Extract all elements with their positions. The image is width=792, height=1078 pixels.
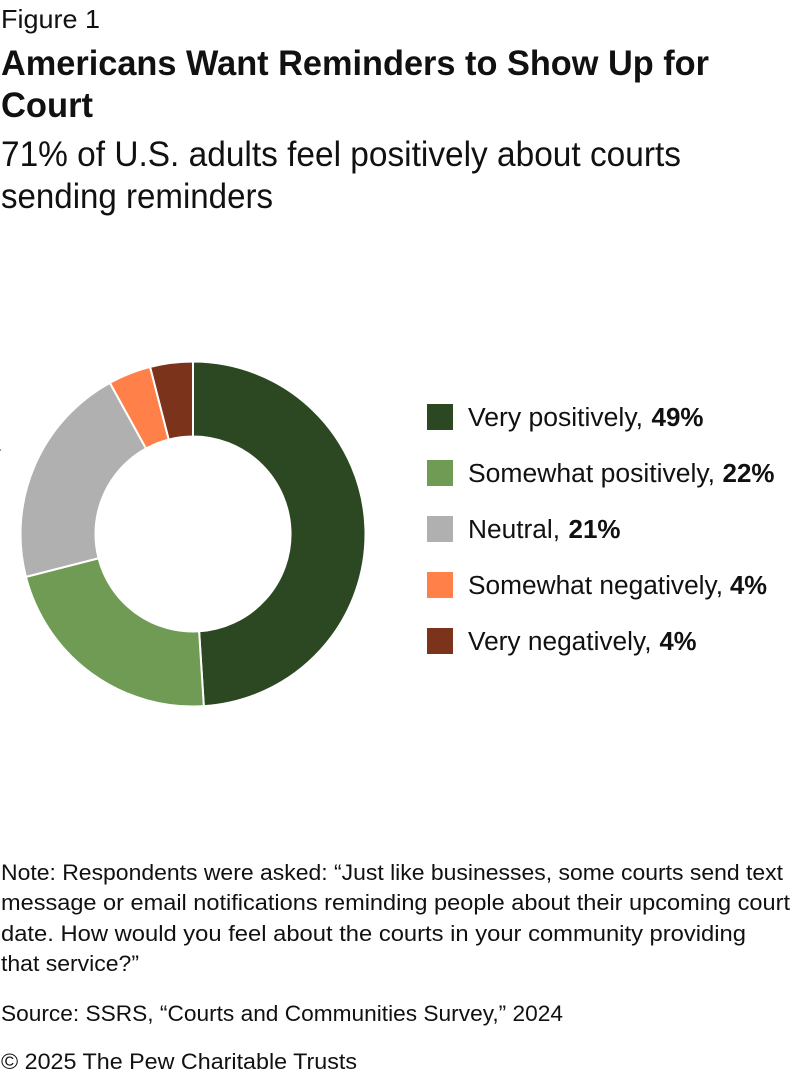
legend item: very negatively [427,628,696,656]
legend item: neutral: Neutral, [468,516,560,544]
note: Note: Respondents were asked: “Just like businesses, some courts send text [1,860,784,885]
donut chart [21,362,366,707]
segment: very negatively 4% [150,362,193,440]
legend item: somewhat positively: Somewhat positively, [468,460,715,488]
note [1,860,791,976]
title [1,44,709,125]
legend item: very negatively: 4% [660,628,696,656]
legend item: neutral [427,516,620,544]
note: that service?” [1,951,139,976]
source: Source: SSRS, “Courts and Communities Survey,” 2024 [1,1001,563,1026]
legend item: somewhat negatively: Somewhat negatively, [468,572,723,600]
subtitle [1,135,681,216]
stray tick mark [0,450,1,451]
segment: somewhat negatively 4% [110,367,169,449]
segment: somewhat positively 22% [26,558,204,707]
note: message or email notifications reminding people about their upcoming court [1,890,791,915]
legend item: very positively: Very positively, [468,404,643,432]
legend item: somewhat negatively: 4% [730,572,767,600]
legend item: very positively [427,404,704,432]
title: Americans Want Reminders to Show Up for [1,44,709,83]
legend item: somewhat positively [427,460,774,488]
legend item: neutral: 21% [568,516,620,544]
legend item: very positively: 49% [652,404,704,432]
subtitle: 71% of U.S. adults feel positively about courts [1,135,681,174]
subtitle: sending reminders [1,177,273,216]
title: Court [1,86,93,125]
copyright: © 2025 The Pew Charitable Trusts [1,1049,357,1074]
legend [427,404,774,656]
legend item: somewhat positively: 22% [722,460,774,488]
segment: very positively 49% [193,362,366,706]
note: date. How would you feel about the courts in your community providing [1,921,746,946]
segment: neutral 21% [21,383,146,577]
figure label: Figure 1 [1,4,100,34]
legend item: very negatively: Very negatively, [468,628,652,656]
